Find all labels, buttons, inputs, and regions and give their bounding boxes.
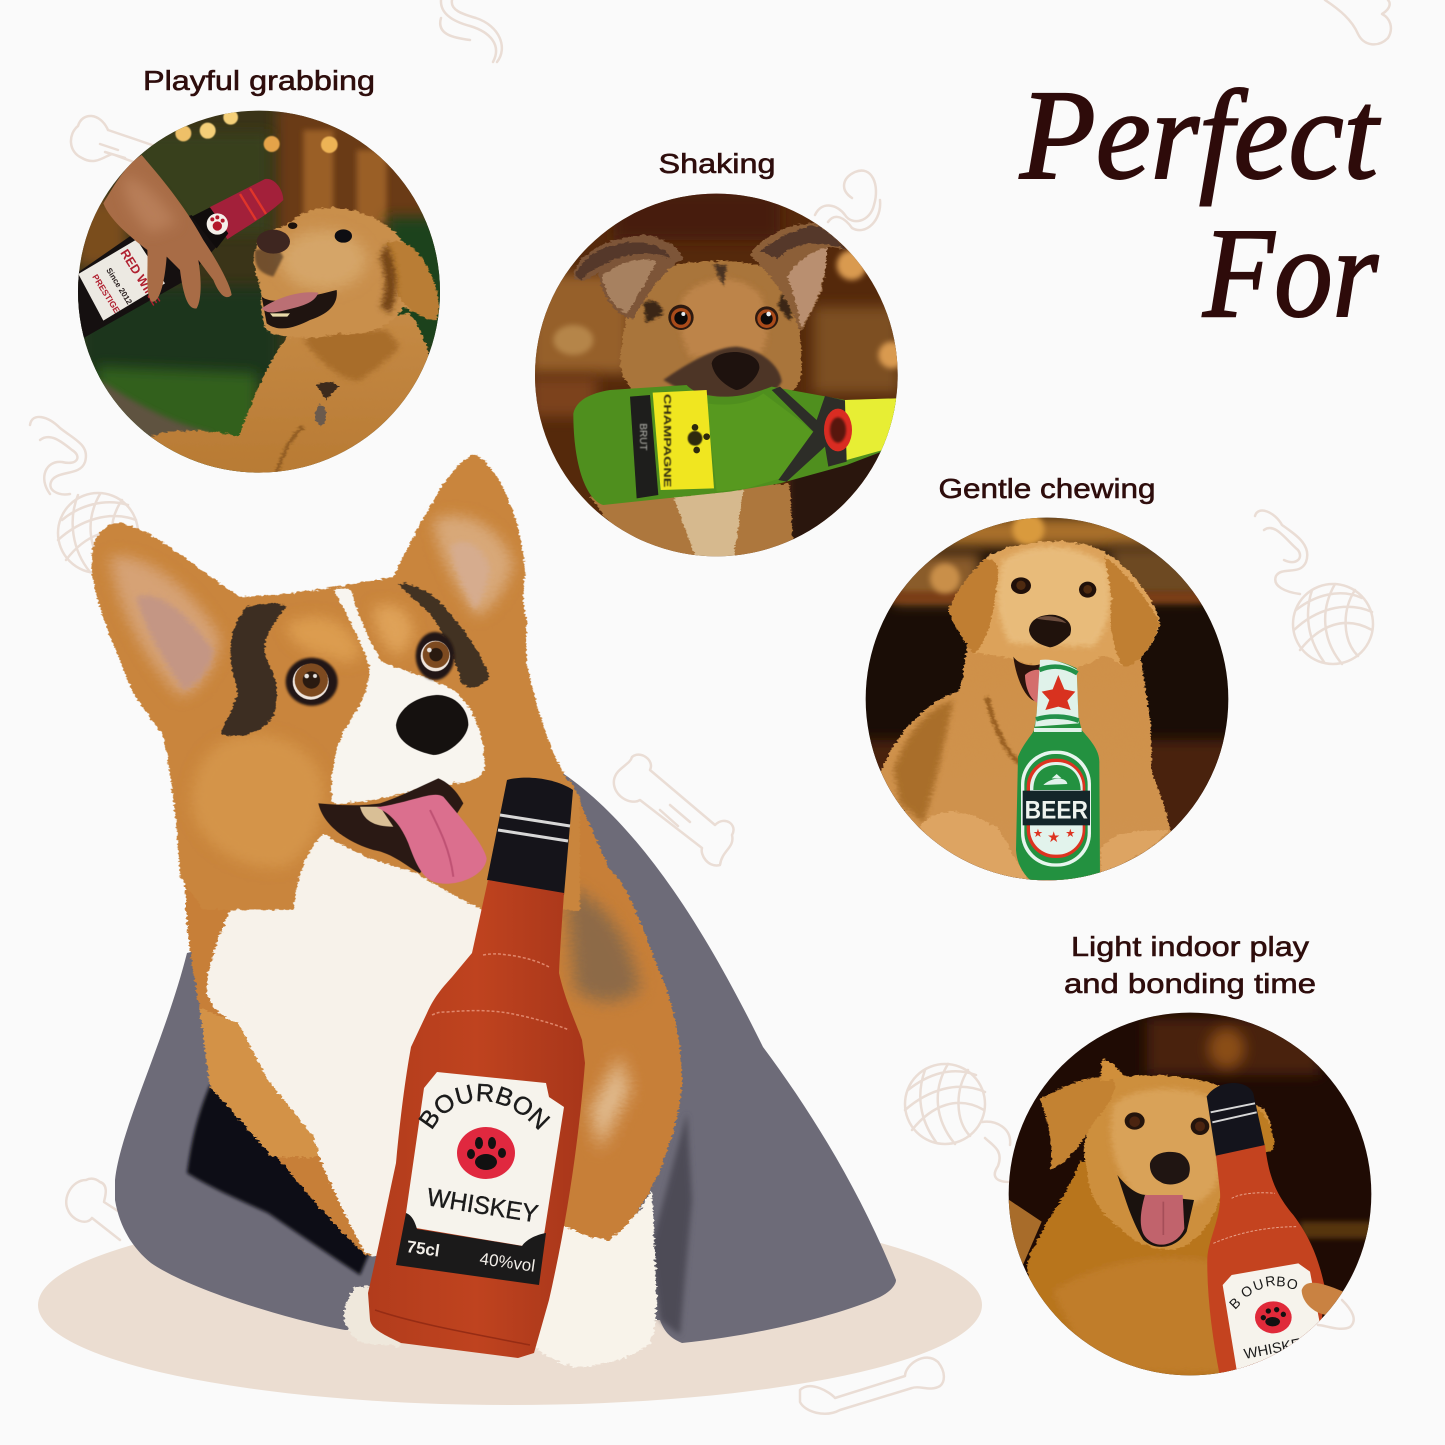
label: light indoor play and bonding time <box>1064 931 1316 999</box>
nose <box>1150 1152 1190 1184</box>
hand <box>103 155 232 308</box>
left paw <box>344 1285 401 1347</box>
label: light indoor play and bonding time: and bonding time <box>1064 968 1316 999</box>
dog <box>880 541 1173 883</box>
mouth <box>318 778 463 873</box>
white blaze and muzzle <box>331 588 485 803</box>
dog <box>573 223 847 560</box>
whiskey bottle toy <box>368 778 585 1358</box>
neck and head fur <box>92 455 580 910</box>
toy: champagne bottle: BRUT <box>637 423 648 451</box>
right flank shading <box>566 885 640 1002</box>
label: gentle chewing: Gentle chewing <box>938 473 1156 504</box>
toy: bourbon bottle: O <box>1285 1275 1299 1293</box>
whiskey bottle toy: BOURBON <box>418 1084 550 1130</box>
label: shaking: Shaking <box>658 148 776 179</box>
nose <box>396 695 468 755</box>
mouth and tongue <box>1117 1175 1194 1247</box>
toy: beer bottle: ★ <box>1033 826 1043 840</box>
label: playful grabbing: Playful grabbing <box>143 65 375 96</box>
white chest <box>207 850 500 1280</box>
corgi head <box>92 455 580 1023</box>
toy: red wine bottle: Since 2012 <box>104 266 134 307</box>
toy: beer bottle: ★ <box>1065 826 1075 840</box>
toy: champagne bottle: CHAMPAGNE <box>661 394 672 488</box>
whiskey bottle toy: 75cl <box>405 1237 441 1261</box>
toy: bourbon bottle: O <box>1238 1282 1255 1301</box>
toy: bourbon bottle: R <box>1264 1272 1276 1290</box>
eyes <box>1011 577 1031 594</box>
blanket <box>115 770 896 1343</box>
toy: bourbon bottle: U <box>1251 1276 1266 1294</box>
toy: bourbon bottle: WHISKEY <box>1243 1334 1312 1363</box>
orange flank left <box>199 1007 319 1157</box>
eyes <box>286 658 338 706</box>
nose and mouth <box>1029 615 1071 647</box>
toy: bourbon bottle <box>1207 1083 1343 1385</box>
panel: shaking photo <box>530 190 910 560</box>
muzzle and mouth <box>262 290 337 328</box>
right front leg <box>534 1190 656 1367</box>
corgi body fur <box>185 780 682 1367</box>
toy: beer bottle <box>1016 660 1100 880</box>
title <box>1019 64 1381 344</box>
dog <box>1027 1060 1273 1385</box>
toy: beer bottle: ★ <box>1047 829 1060 846</box>
toy: beer bottle: BEER <box>1025 797 1088 825</box>
ear inners <box>110 556 220 697</box>
blanket shadow fold <box>651 1113 692 1335</box>
bottle label black band <box>396 1213 546 1285</box>
dark face patches <box>220 604 287 736</box>
label: light indoor play and bonding time: Light indoor play <box>1071 931 1309 962</box>
toy: red wine bottle <box>77 179 283 340</box>
toy: bourbon bottle: B <box>1276 1273 1286 1290</box>
eyes <box>668 305 694 330</box>
toy: red wine bottle: RED WINE <box>117 247 163 308</box>
whiskey bottle toy: 40%vol <box>478 1249 536 1276</box>
toy: red wine bottle: PRESTIGE <box>90 272 122 315</box>
muzzle and nose <box>663 347 782 402</box>
toy: bourbon bottle: B <box>1226 1294 1244 1312</box>
chin and chest white <box>243 833 500 1023</box>
floor ellipse <box>38 1205 982 1405</box>
hero: corgi wrapped in blanket with whiskey toy <box>90 454 896 1368</box>
dog <box>150 208 440 480</box>
panel: playful grabbing photo <box>70 100 450 480</box>
panel: gentle chewing photo <box>860 510 1240 890</box>
tongue <box>377 795 487 884</box>
title: For <box>1202 202 1379 344</box>
eyes <box>1125 1112 1145 1130</box>
panel: indoor play photo <box>1000 1005 1380 1385</box>
bottle label <box>406 1072 564 1246</box>
blanket hollow <box>187 1085 375 1275</box>
dog head <box>254 208 437 338</box>
whiskey bottle toy: WHISKEY <box>425 1183 540 1228</box>
toy: champagne bottle <box>573 385 897 505</box>
title: Perfect <box>1019 64 1381 206</box>
